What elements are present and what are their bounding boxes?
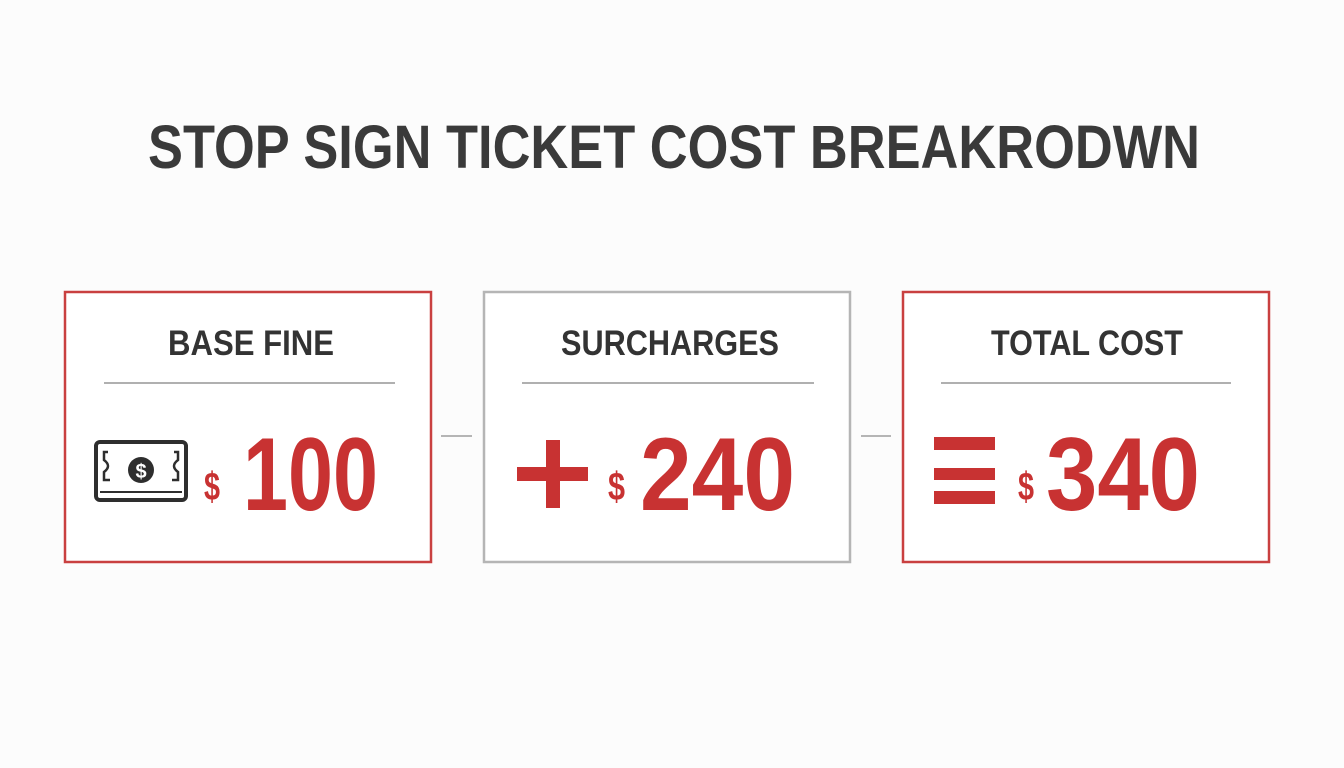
heading: surcharges: SURCHARGES xyxy=(561,324,779,363)
value: 340: $ xyxy=(1018,465,1034,509)
value: 240: 240 xyxy=(640,417,795,533)
connector: surcharges to total xyxy=(861,435,891,437)
panel: surcharges xyxy=(484,292,850,562)
value: 340: 340 xyxy=(1046,417,1200,533)
heading: base fine: BASE FINE xyxy=(168,324,334,363)
connector: base to surcharges xyxy=(441,435,472,437)
value: 100: 100 xyxy=(243,417,378,533)
heading: total cost: TOTAL COST xyxy=(991,324,1183,363)
icon: plus xyxy=(517,440,588,508)
panel: total cost xyxy=(903,292,1269,562)
value: 100 xyxy=(204,417,378,533)
icon: equals xyxy=(934,437,995,504)
panel: base fine xyxy=(65,292,431,562)
value: 100: $ xyxy=(204,465,220,509)
value: 240: $ xyxy=(608,465,625,509)
title: STOP SIGN TICKET COST BREAKRODWN xyxy=(148,113,1200,181)
icon: banknote xyxy=(96,442,186,500)
icon: banknote: $ xyxy=(135,461,147,483)
